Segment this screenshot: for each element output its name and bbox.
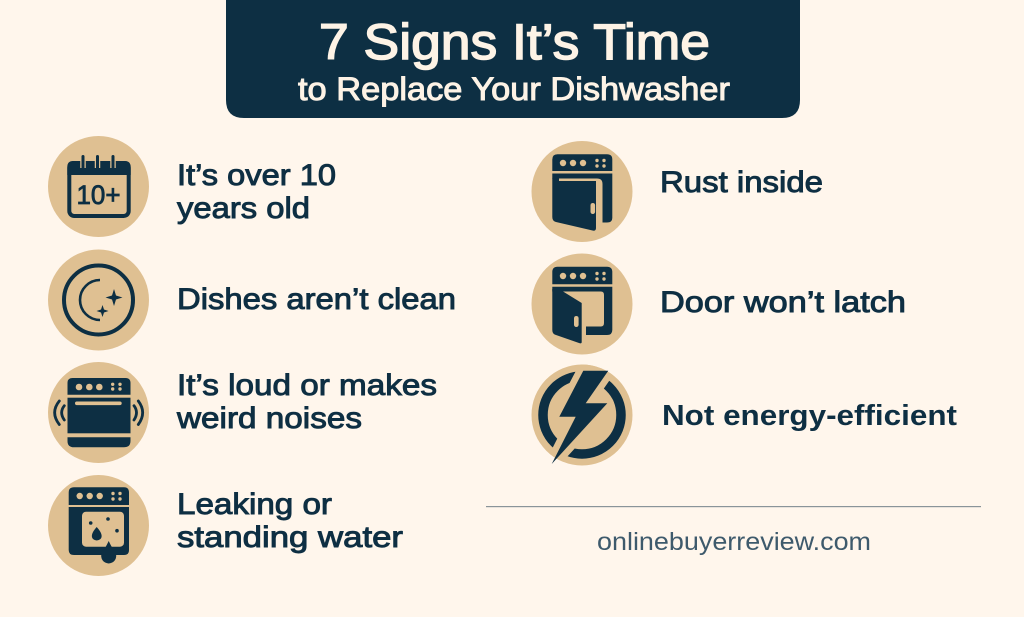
icon: lightning bolt in ring: [532, 364, 632, 466]
website footer: onlinebuyerreview.com: [597, 528, 871, 556]
sign 6: door won't latch: [532, 254, 906, 354]
label text: Door won’t latch: [660, 286, 906, 319]
label text: Not energy-efficient: [662, 400, 957, 432]
sign 1: over 10 years old: years old: [177, 192, 310, 225]
sign 5: rust inside: [532, 141, 823, 242]
icon: vibrating dishwasher: [48, 362, 149, 463]
icon: dishwasher with door ajar: [532, 141, 632, 242]
icon: crescent and sparkles: [48, 250, 149, 350]
sign 4: leaking or standing water: [48, 475, 403, 576]
title banner: [226, 0, 800, 118]
label text: It’s over 10: [177, 159, 336, 192]
sign 7: not energy-efficient: [532, 364, 957, 466]
sign 2: dishes aren't clean: [48, 250, 456, 350]
icon: leaking dishwasher: [48, 475, 149, 576]
label text: Rust inside: [660, 166, 823, 199]
icon: dishwasher with open door: [532, 254, 632, 354]
title line 1: 7 Signs It’s Time: [319, 14, 710, 70]
title line 2: to Replace Your Dishwasher: [298, 71, 730, 107]
sign 3: loud or weird noises: weird noises: [176, 402, 362, 435]
label text: Leaking or: [177, 488, 332, 521]
sign 1: over 10 years old: [48, 136, 336, 237]
label text: Dishes aren’t clean: [177, 283, 456, 316]
icon: calendar 10+: [48, 136, 149, 237]
icon: calendar 10+: 10+: [76, 180, 120, 210]
sign 3: loud or weird noises: [48, 362, 437, 463]
label text: It’s loud or makes: [177, 369, 437, 402]
sign 4: leaking or standing water: standing water: [177, 521, 403, 554]
